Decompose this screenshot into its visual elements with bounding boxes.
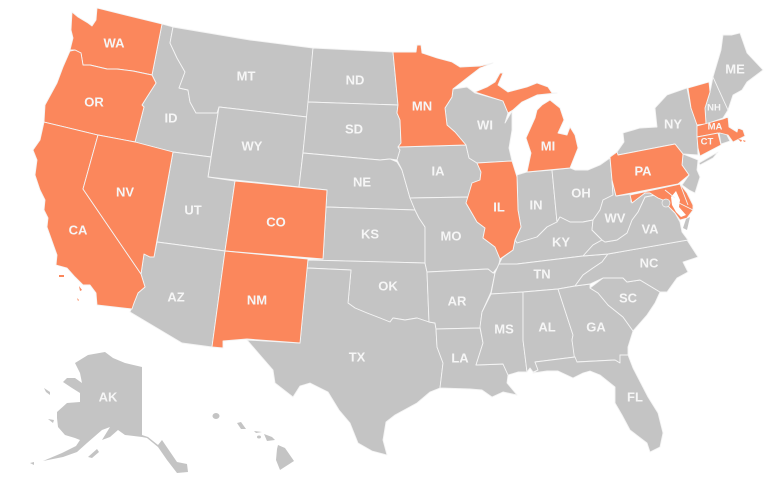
state: VT [688,82,710,125]
state: TN: TN [533,266,551,282]
state: VA [583,195,690,256]
state: GA: GA [586,320,606,334]
state: ID: ID [164,110,178,126]
state: PA: PA [634,164,652,178]
state: WV [592,180,655,242]
state: NY: NY [664,116,682,132]
state: HI [212,413,294,470]
state: KY [499,217,602,264]
state: IL [466,161,521,259]
state: CT: CT [701,136,714,148]
state: GA [558,284,633,363]
state: MT [170,27,313,117]
state: MA: MA [708,122,723,132]
state: AR [427,269,495,329]
state: MN [393,45,493,147]
state: MT: MT [237,68,255,84]
state: NC: NC [640,256,659,270]
state: OR [44,50,156,142]
state: KY: KY [552,234,570,250]
state: WI: WI [477,118,493,132]
state: CA [33,122,145,309]
state: SC [590,278,660,331]
state: ME: ME [725,62,745,76]
state: WA [70,8,162,75]
state: CA: CA [69,222,88,238]
state: SC: SC [619,290,638,306]
state: KS: KS [361,226,379,242]
state: PA [610,144,689,196]
state: MN: MN [412,98,432,114]
state: MI: MI [541,138,555,154]
state: NH [705,77,728,124]
state: TN [491,254,608,294]
state: AR: AR [448,294,467,308]
state: MO: MO [441,228,461,244]
state: KS [308,207,425,263]
state: CT [697,133,721,156]
state: AK [30,352,188,473]
state: WA: WA [104,36,125,50]
state: WY: WY [242,138,263,154]
state: FL [533,355,663,452]
state: SD [303,102,401,160]
state: ID [135,24,219,157]
state: NM: NM [247,292,267,308]
state: OK [307,260,429,322]
state: MS [476,292,527,375]
state: IA [397,145,481,198]
state: MA [697,117,746,142]
state: NE: NE [353,174,371,190]
state: WV: WV [605,210,626,226]
state: IN [515,170,557,243]
state: OH [552,158,613,222]
state: MD and DE [630,184,693,220]
state: AZ: AZ [167,290,185,304]
state: CO [225,181,327,259]
state: OH: OH [571,186,591,200]
state: TX: TX [349,350,366,364]
state: NV [83,135,173,274]
state: NE [299,153,415,210]
state: NH: NH [707,102,721,114]
state: AZ [130,242,225,347]
state: VA: VA [641,222,659,236]
state: IL: IL [493,200,505,214]
state: AL [523,289,575,372]
state: ME [713,33,763,110]
state: TX [247,268,443,455]
state: WI [445,87,512,163]
state: AK: AK [99,390,118,404]
state: MI [475,73,578,172]
icon: Long Island [699,152,718,165]
state: OR: OR [84,94,104,110]
state: OK: OK [378,278,398,294]
state: IA: IA [432,164,445,178]
state: LA [436,328,517,397]
state: SD: SD [345,122,363,136]
state: NY [617,88,698,155]
state: UT: UT [184,202,202,218]
state: RI [719,133,730,144]
state: MS: MS [494,322,514,336]
state: LA: LA [451,350,469,366]
state: MO [410,197,500,273]
state: NC [575,240,698,292]
state: NM [212,251,308,348]
state: IN: IN [530,198,542,212]
state: CO: CO [266,214,286,230]
state: ND: ND [346,72,364,88]
state: ND [308,48,398,105]
state: WY [208,107,307,187]
state: FL: FL [627,390,643,404]
state: UT [157,152,235,251]
state: NJ [682,154,700,193]
state: NV: NV [116,184,134,200]
state: AL: AL [538,320,556,334]
